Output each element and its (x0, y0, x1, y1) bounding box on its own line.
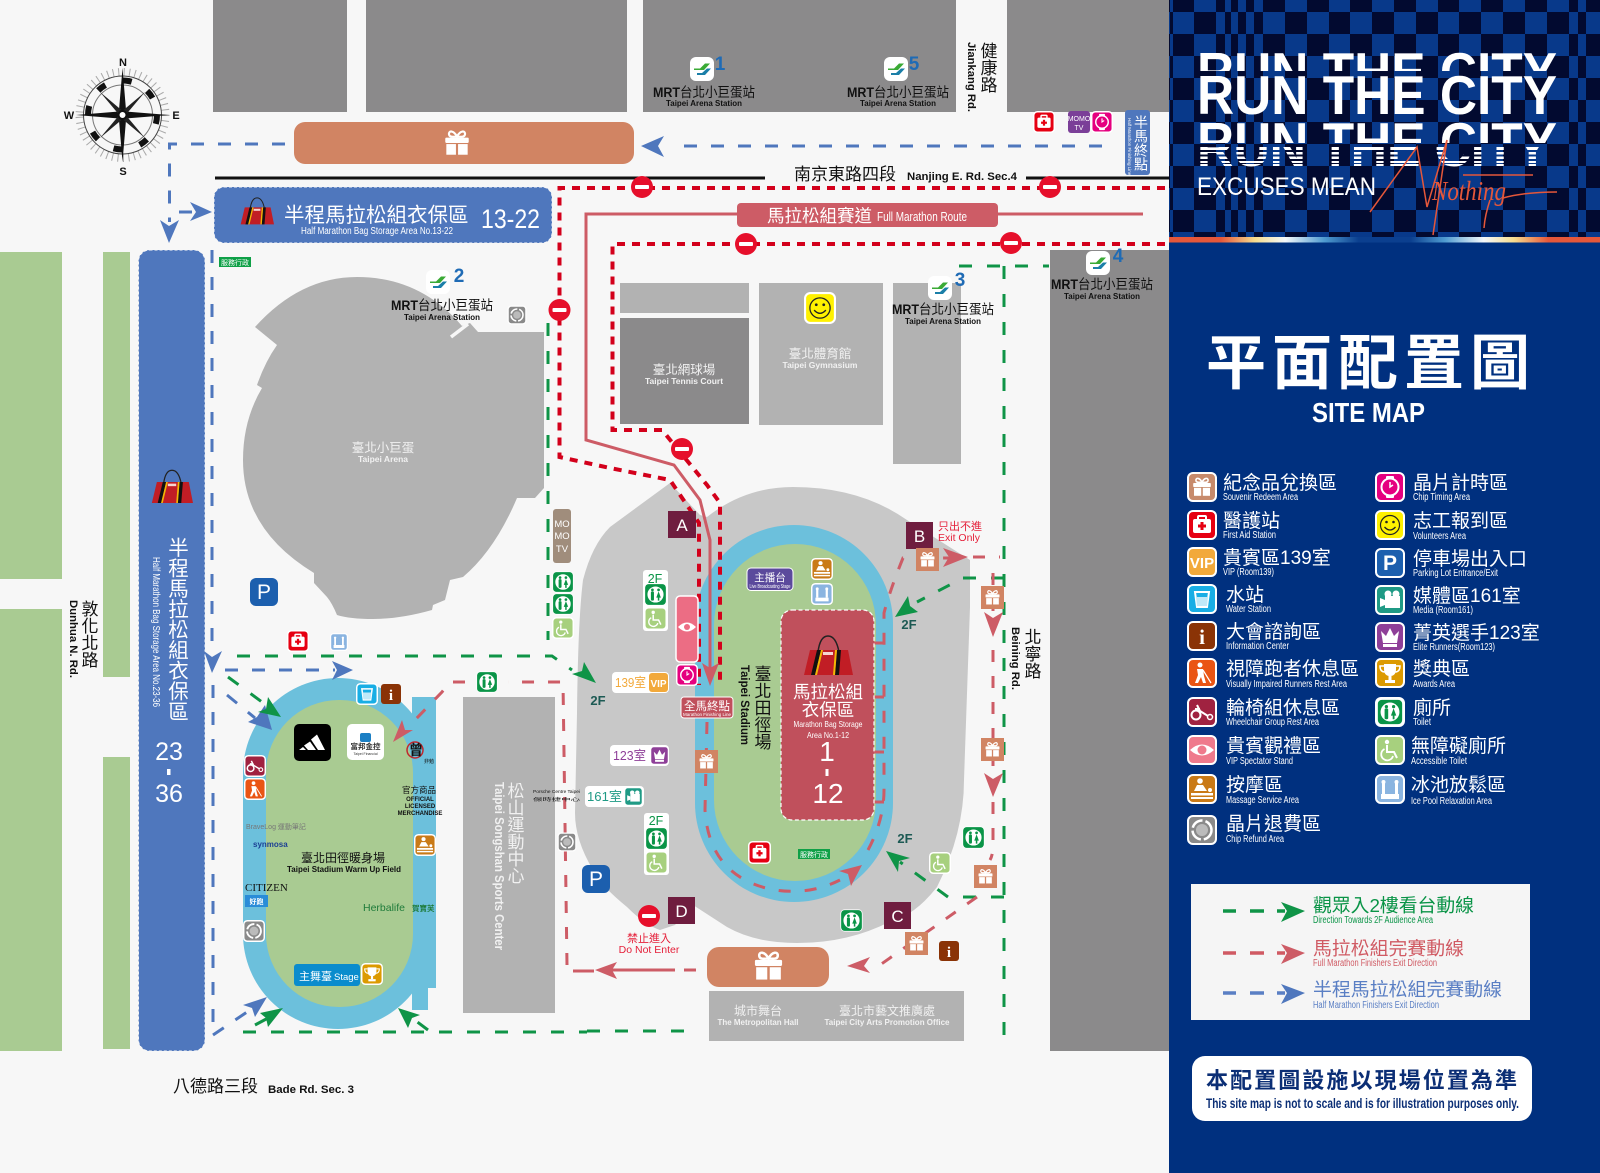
legend item: visually impaired (1188, 658, 1359, 690)
map background (0, 0, 1170, 1173)
label: Taipei Stadium: Taipei Stadium (738, 665, 752, 745)
panel: half marathon bag storage 23-36 (138, 250, 205, 1051)
2F floor labels (590, 617, 917, 846)
sponsor: blue tag (245, 895, 268, 907)
legend route: half marathon: 半程馬拉松組完賽動線 (1313, 979, 1502, 1000)
legend item: elite: 菁英選手123室 (1413, 622, 1540, 644)
label: Taipei Stadium (738, 665, 771, 751)
label: Taipei Stadium: 臺北田徑場 (752, 665, 771, 751)
legend item: VIP: VIP (1190, 555, 1214, 572)
sponsor: Herbalife: 賀寶芙 (412, 903, 435, 913)
legend item: information: Information Center (1226, 641, 1290, 652)
legend route: full marathon: Full Marathon Finishers Exit Direction (1313, 958, 1437, 969)
icon: info (939, 941, 959, 961)
label: MOMO TV: MO (554, 531, 570, 542)
sponsor: blue tag: 好跑 (250, 897, 264, 906)
icons: gifts on route (695, 548, 1004, 955)
building: Metropolitan Hall and Arts Promotion Office: 臺北市藝文推廣處 (839, 1003, 935, 1018)
legend item: volunteers: 志工報到區 (1413, 510, 1508, 532)
MRT exit 1: Taipei Arena Station (666, 98, 742, 108)
label: Bade Rd.: 八德路三段 (173, 1077, 258, 1096)
MRT exit 4 (1051, 246, 1153, 301)
panel: half marathon bag storage 23-36: 半程馬拉松組衣保區 (164, 537, 189, 722)
building: Songshan Sports Center: 松山運動中心 (504, 782, 524, 884)
building: annex block (893, 283, 961, 464)
legend item: elite: Elite Runners(Room123) (1413, 642, 1495, 653)
legend item: VIP: VIP (Room139) (1223, 567, 1274, 578)
icons on warm up field: i (389, 688, 393, 704)
legend item: media: 媒體區161室 (1413, 585, 1521, 607)
building: Metropolitan Hall and Arts Promotion Office (709, 991, 964, 1041)
compass: W (64, 110, 75, 122)
slogan: Nothing: Nothing (1431, 176, 1506, 206)
label: Do Not Enter (619, 932, 680, 956)
legend item: water (1188, 584, 1271, 615)
slogan: RUN THE CITY: RUN THE CITY (1197, 64, 1557, 126)
panel: half marathon finish line: 半馬終點 (1133, 115, 1149, 171)
legend item: volunteers: Volunteers Area (1413, 531, 1466, 542)
building: Taipei Tennis Court: 臺北網球場 (653, 362, 715, 377)
label: Dunhua N. Rd. (67, 600, 98, 678)
label: warm up field (287, 850, 401, 874)
label: Porsche Centre Taipei (533, 789, 581, 803)
legend route: full marathon (1223, 938, 1464, 969)
label: Beining Rd. (1009, 627, 1041, 690)
slogan: RUN THE CITY: RUN THE CITY (1197, 41, 1557, 103)
label: media room 161: 161室 (587, 789, 622, 804)
legend item: awards (1376, 658, 1470, 690)
sponsor: calligraphy logo: 非勉 (424, 758, 434, 765)
MRT exit 5: Taipei Arena Station (860, 98, 936, 108)
label: MOMO TV: MO (554, 519, 570, 530)
legend item: first aid (1188, 510, 1280, 541)
icons on stadium (677, 559, 984, 931)
label: full marathon route (737, 203, 998, 227)
gate D (668, 897, 695, 924)
panel: marathon bag storage 1-12: 1 (819, 736, 835, 767)
slogan: EXCUSES MEAN: EXCUSES MEAN (1197, 173, 1376, 201)
MRT exit 3: MRT台北小巨蛋站 (892, 302, 994, 317)
full marathon finisher route (393, 548, 1003, 979)
legend item: ice pool: 冰池放鬆區 (1411, 774, 1506, 796)
MRT exit 2 (391, 266, 493, 322)
label: Porsche Centre Taipei: 保時捷中心 (533, 796, 581, 803)
MRT exit 5: 5 (909, 54, 920, 75)
legend item: parking: 停車場出入口 (1413, 548, 1527, 570)
label: Nanjing E. Rd. (794, 165, 1018, 184)
legend item: toilet: 廁所 (1413, 696, 1451, 719)
label: Bade Rd. (173, 1077, 354, 1096)
compass (64, 57, 180, 178)
building: Metropolitan Hall and Arts Promotion Office: Taipei City Arts Promotion Office (824, 1017, 950, 1027)
panel: marathon bag storage 1-12: Marathon Bag Storage (794, 719, 863, 729)
panel: half marathon bag storage 13-22: 13-22 (481, 204, 540, 234)
label: Porsche Centre Taipei: Porsche Centre Taipei (533, 789, 580, 794)
sponsor: Herbalife: Herbalife (363, 902, 405, 914)
legend item: accessible toilet (1376, 734, 1506, 767)
icon: parking arena (250, 578, 278, 606)
slogan: RUN THE CITY (1200, 52, 1556, 166)
icon group: 2F toilets south (644, 813, 669, 875)
warm up field track (243, 678, 436, 1029)
legend item: information: i (1199, 625, 1205, 649)
legend item: souvenir: Souvenir Redeem Area (1223, 492, 1298, 503)
icon group: 2F toilets north (643, 570, 668, 631)
MRT exit 4: MRT台北小巨蛋站 (1051, 277, 1153, 292)
sponsor: Fubon Financial: 富邦金控 (350, 741, 381, 751)
panel: half marathon bag storage 13-22: 半程馬拉松組衣保區 (284, 204, 468, 227)
legend item: visually impaired: Visually Impaired Runners Rest Area (1226, 679, 1347, 690)
gate C (884, 902, 911, 929)
label: Do Not Enter: Do Not Enter (619, 944, 680, 956)
label: Beining Rd.: Beining Rd. (1009, 627, 1021, 690)
label: Do Not Enter: 禁止進入 (627, 932, 671, 945)
panel: half marathon bag storage 23-36: 23 (155, 738, 183, 766)
MRT exit 4: Taipei Arena Station (1064, 291, 1140, 301)
restricted route: inner red dashed line (612, 244, 1165, 685)
label: official licensed merchandise: 官方商品 (402, 785, 436, 795)
restricted route: outer red dashed line (560, 188, 1165, 685)
gate B: B (914, 527, 925, 546)
gate A (668, 511, 696, 538)
legend item: water: 水站 (1226, 584, 1264, 606)
building: Taipei Arena: Taipei Arena (358, 454, 408, 464)
legend item: accessible toilet: 無障礙廁所 (1411, 734, 1506, 757)
half marathon finisher route (160, 136, 1102, 1035)
panel: half marathon bag storage 13-22 (214, 187, 552, 243)
main stage (294, 964, 360, 986)
label: full marathon route: Full Marathon Route (877, 210, 967, 224)
label: full marathon route: 馬拉松組賽道 (767, 206, 872, 226)
compass: E (172, 110, 180, 122)
panel: half marathon bag storage 13-22: Half Marathon Bag Storage Area No.13-22 (301, 226, 453, 237)
icon: volunteers smile (805, 293, 835, 323)
2F floor labels: 2F (901, 617, 917, 632)
disclaimer box (1192, 1056, 1532, 1121)
MRT exit 1 (653, 54, 755, 108)
main stadium track (695, 525, 893, 902)
label: Dunhua N. Rd.: 敦化北路 (78, 600, 98, 668)
panel: marathon bag storage 1-12: 衣保區 (802, 700, 854, 720)
legend route: full marathon: 馬拉松組完賽動線 (1313, 938, 1464, 959)
legend route: spectators: Direction Towards 2F Audience Area (1313, 915, 1433, 926)
main stage: Stage (334, 972, 359, 983)
legend item: parking: P (1383, 552, 1397, 575)
sponsor: synmosa: synmosa (253, 840, 288, 849)
legend item: water: Water Station (1226, 604, 1271, 615)
compass: N (119, 57, 127, 69)
label: Jiankang Rd.: Jiankang Rd. (965, 42, 977, 112)
legend item: first aid: 醫護站 (1223, 510, 1280, 532)
label: Dunhua N. Rd.: Dunhua N. Rd. (67, 600, 79, 678)
MRT exit 3: 3 (955, 270, 965, 291)
label: official licensed merchandise: MERCHANDISE (398, 811, 442, 817)
sponsor: calligraphy logo (407, 742, 434, 765)
legend item: chip timing: Chip Timing Area (1413, 492, 1470, 503)
gift bar: top souvenir redeem area (294, 122, 634, 164)
road lines (215, 176, 1169, 180)
legend: route lines (1191, 884, 1530, 1020)
label: Nanjing E. Rd.: 南京東路四段 (794, 165, 896, 184)
legend item: VIP spectator: 貴賓觀禮區 (1226, 735, 1321, 757)
label: warm up field: 臺北田徑暖身場 (301, 850, 385, 865)
title: 平面配置圖 (1206, 330, 1536, 397)
MRT exit 5 (847, 54, 949, 108)
label: VIP room 139: VIP (650, 679, 667, 690)
main stage: 主舞臺 (299, 969, 332, 983)
icon: parking south (582, 865, 610, 893)
label: live broadcasting stage (747, 568, 793, 590)
2F floor labels: 2F (897, 831, 913, 846)
legend item: wheelchair: 輪椅組休息區 (1226, 697, 1340, 719)
MRT exit 1: MRT台北小巨蛋站 (653, 85, 755, 100)
icon: info: i (947, 945, 951, 961)
spectator route to 2F (228, 266, 1049, 1038)
legend item: souvenir (1188, 471, 1337, 503)
building: Taipei Tennis Court (620, 283, 749, 424)
legend item: information: 大會諮詢區 (1226, 621, 1321, 643)
no-entry signs (548, 176, 1061, 927)
icon: parking south: P (589, 868, 603, 891)
MRT exit 3 (892, 270, 994, 326)
disclaimer box: 本配置圖設施以現場位置為準 (1206, 1068, 1517, 1093)
label: official licensed merchandise (398, 785, 442, 817)
panel: marathon bag storage 1-12: 12 (812, 778, 844, 809)
building: Metropolitan Hall and Arts Promotion Office: The Metropolitan Hall (718, 1017, 798, 1027)
legend item: visually impaired: 視障跑者休息區 (1226, 658, 1359, 680)
dark grey city blocks (213, 0, 1169, 1051)
Taipei Stadium grounds (575, 483, 970, 943)
2F floor labels: 2F (590, 693, 606, 708)
MRT exit 2: Taipei Arena Station (404, 312, 480, 322)
legend item: chip refund: 晶片退費區 (1226, 813, 1321, 835)
warm up field contents (244, 684, 442, 986)
label: Exit Only: Exit Only (938, 532, 981, 544)
label: official licensed merchandise: LICENSED (405, 804, 436, 810)
marathon finish line label: Marathon Finishing Line (683, 712, 732, 717)
legend route: half marathon (1223, 979, 1502, 1011)
legend item: toilet (1375, 696, 1451, 728)
gate C: C (891, 907, 904, 926)
label: Jiankang Rd.: 健康路 (978, 42, 997, 93)
panel: half marathon finish line: Half Marathon Finishing Line (1127, 118, 1132, 176)
legend item: information (1188, 621, 1321, 652)
building: Taipei Arena (243, 277, 544, 619)
icons on top road: MOMO (1068, 116, 1091, 123)
icon: parking arena: P (257, 581, 271, 604)
icons on top road: TV (1075, 125, 1084, 132)
slogan: RUN THE CITY: RUN THE CITY (1197, 121, 1549, 177)
label: Exit Only (938, 519, 982, 544)
legend item: VIP (1188, 547, 1331, 578)
green service tags (219, 257, 830, 859)
slogan: RUN THE CITY: RUN THE CITY (1197, 111, 1557, 173)
panel: marathon bag storage 1-12: 馬拉松組 (793, 682, 863, 702)
VIP spectator stand (676, 596, 698, 662)
building: Taipei Gymnasium (759, 283, 883, 425)
marathon finish line label: 全馬終點 (684, 699, 730, 713)
building: Metropolitan Hall and Arts Promotion Office: 城市舞台 (734, 1003, 782, 1018)
label: Exit Only: 只出不進 (938, 519, 982, 533)
legend item: VIP: 貴賓區139室 (1223, 547, 1331, 569)
legend item: VIP spectator: VIP Spectator Stand (1226, 756, 1293, 767)
building: Taipei Tennis Court: Taipei Tennis Court (645, 376, 723, 386)
green service tags: 服務行政 (221, 258, 249, 267)
label: MOMO TV: TV (556, 544, 569, 555)
label: media room 161 (585, 786, 644, 807)
gift bar: bottom souvenir redeem area (707, 947, 829, 987)
compass: S (119, 166, 127, 178)
legend item: chip refund (1188, 813, 1321, 845)
MRT exit 5: MRT台北小巨蛋站 (847, 85, 949, 100)
icons on warm up field (244, 684, 435, 984)
label: Jiankang Rd. (965, 42, 997, 112)
MRT exit 1: 1 (715, 54, 726, 75)
green strips along Dunhua N. Rd. (0, 252, 130, 1051)
icons near arena (288, 306, 576, 851)
legend route: spectators: 觀眾入2樓看台動線 (1313, 895, 1474, 916)
legend item: massage: 按摩區 (1226, 774, 1283, 796)
building: Taipei Gymnasium: 臺北體育館 (789, 346, 851, 361)
legend item: elite (1376, 622, 1540, 653)
MRT exit 3: Taipei Arena Station (905, 316, 981, 326)
green service tags: 服務行政 (800, 850, 828, 859)
panel: marathon bag storage 1-12 (781, 610, 874, 820)
legend route: spectators (1223, 895, 1474, 926)
label: Beining Rd.: 北寧路 (1022, 628, 1041, 679)
legend item: massage (1188, 774, 1299, 806)
label: MOMO TV (553, 509, 571, 563)
legend item: chip timing (1376, 472, 1508, 503)
marathon finish line label (681, 697, 733, 718)
building: Songshan Sports Center (463, 697, 555, 1013)
sponsor: Fubon Financial (347, 724, 384, 760)
building: Songshan Sports Center: Taipei Songshan Sports Center (492, 782, 507, 950)
legend item: accessible toilet: Accessible Toilet (1411, 756, 1467, 767)
label: live broadcasting stage: 主播台 (754, 571, 786, 584)
icon group: 2F toilets north: 2F (648, 572, 663, 586)
legend item: parking: Parking Lot Entrance/Exit (1413, 568, 1498, 579)
label: live broadcasting stage: Live Broadcasting Stage (750, 584, 791, 590)
legend item: parking (1376, 548, 1527, 579)
sponsor: Herbalife (363, 902, 435, 914)
sponsor: adidas (294, 724, 331, 761)
label: VIP room 139 (612, 672, 669, 693)
icons on top road (1034, 111, 1112, 133)
legend item: chip refund: Chip Refund Area (1226, 834, 1284, 845)
legend item: first aid: First Aid Station (1223, 530, 1276, 541)
label: elite room 123 (610, 745, 669, 766)
legend route: half marathon: Half Marathon Finishers Exit Direction (1313, 1000, 1439, 1011)
legend item: chip timing: 晶片計時區 (1413, 472, 1508, 494)
building: Taipei Gymnasium: Taipei Gymnasium (783, 360, 858, 370)
panel: half marathon bag storage 23-36: 36 (155, 780, 183, 808)
legend: icons and names (1188, 471, 1540, 845)
right side panel (1169, 0, 1600, 1173)
legend item: massage: Massage Service Area (1226, 795, 1299, 806)
sponsor: calligraphy logo: 曾 (409, 742, 423, 758)
legend item: souvenir: 紀念品兌換區 (1223, 471, 1337, 494)
gate A: A (676, 516, 688, 535)
header: checker banner (1169, 0, 1600, 242)
label: warm up field: Taipei Stadium Warm Up Field (287, 864, 401, 874)
slogan: Nothing (1370, 140, 1557, 235)
panel: marathon bag storage 1-12: Area No.1-12 (807, 730, 849, 740)
subtitle: SITE MAP (1312, 397, 1425, 428)
legend item: ice pool: Ice Pool Relaxation Area (1411, 796, 1492, 807)
icon group: 2F toilets south: 2F (649, 814, 664, 828)
legend item: wheelchair (1188, 697, 1340, 728)
sponsor: BraveLog: BraveLog 運動筆記 (246, 822, 306, 831)
gate D: D (675, 902, 688, 921)
legend item: media: Media (Room161) (1413, 605, 1473, 616)
MRT exit 4: 4 (1113, 246, 1124, 267)
label: Bade Rd.: Bade Rd. Sec. 3 (268, 1084, 354, 1096)
legend item: VIP spectator (1188, 735, 1321, 767)
label: elite room 123: 123室 (613, 748, 646, 763)
legend item: media (1376, 585, 1521, 616)
legend item: volunteers (1376, 510, 1508, 542)
panel: half marathon finish line (1125, 110, 1150, 176)
MRT exit 2: 2 (454, 266, 464, 287)
MRT exit 2: MRT台北小巨蛋站 (391, 298, 493, 313)
legend item: awards: Awards Area (1413, 679, 1455, 690)
building: Taipei Arena: 臺北小巨蛋 (352, 440, 414, 455)
legend item: wheelchair: Wheelchair Group Rest Area (1226, 717, 1319, 728)
sponsor: Citizen: CITIZEN (245, 882, 288, 894)
legend item: ice pool (1376, 774, 1506, 807)
legend item: awards: 獎典區 (1413, 658, 1470, 680)
label: VIP room 139: 139室 (615, 675, 646, 690)
sponsor: Fubon Financial: Taipei Financial (353, 752, 378, 756)
label: official licensed merchandise: OFFICIAL (406, 797, 434, 803)
legend item: toilet: Toilet (1413, 717, 1431, 728)
full marathon route line (586, 214, 1143, 686)
gate B (906, 522, 933, 549)
label: Nanjing E. Rd.: Nanjing E. Rd. Sec.4 (907, 171, 1018, 183)
panel: half marathon bag storage 23-36: Half Marathon Bag Storage Area No.23-36 (150, 557, 161, 707)
